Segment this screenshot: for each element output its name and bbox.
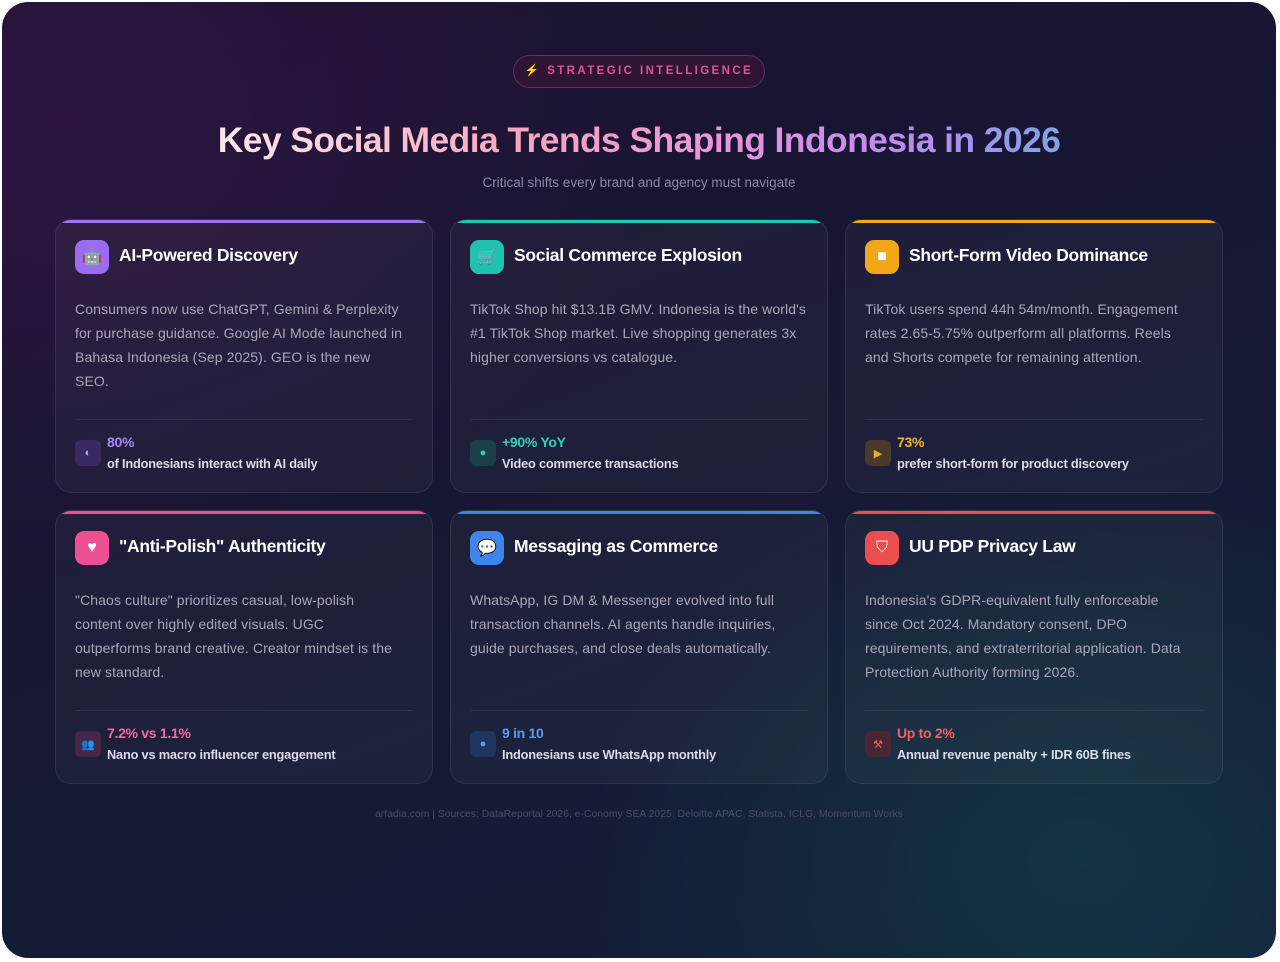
stat icon: ● (480, 447, 486, 459)
icon: cart: 🛒 (477, 249, 497, 266)
icon: shield: ⛉ (876, 539, 888, 556)
heading: AI-Powered Discovery (119, 245, 298, 265)
icon: robot: 🤖 (82, 249, 102, 266)
stat icon (75, 731, 101, 757)
heading: Short-Form Video Dominance (909, 245, 1148, 265)
stat label: Indonesians use WhatsApp monthly (502, 747, 716, 762)
icon: cart (470, 240, 504, 274)
stat label: Annual revenue penalty + IDR 60B fines (897, 747, 1131, 762)
stat value: 80% (107, 434, 134, 450)
stat label: Video commerce transactions (502, 456, 678, 471)
badge (513, 55, 765, 88)
footer: arfadia.com | Sources: DataReportal 2026, e-Conomy SEA 2025, Deloitte APAC, Statista, ICLG, Momentum Works (375, 809, 903, 820)
icon: chat (470, 531, 504, 565)
stat label: prefer short-form for product discovery (897, 456, 1129, 471)
stat icon (865, 731, 891, 757)
stat icon: ▶ (874, 448, 882, 460)
stat value: +90% YoY (502, 434, 566, 450)
stat icon (865, 440, 891, 466)
stat value: 7.2% vs 1.1% (107, 725, 191, 741)
heading: Messaging as Commerce (514, 536, 718, 556)
icon: video: ■ (877, 248, 887, 265)
stat icon (470, 731, 496, 757)
text: TikTok users spend 44h 54m/month. Engagement rates 2.65-5.75% outperform all platforms. Reels and Shorts compete for remaining attention. (865, 301, 1178, 365)
icon: shield (865, 531, 899, 565)
text: WhatsApp, IG DM & Messenger evolved into full transaction channels. AI agents handle inquiries, guide purchases, and close deals automatically. (470, 592, 775, 656)
stat icon: ● (480, 738, 486, 750)
icon: chat: 💬 (477, 540, 497, 557)
stat icon: ◐ (85, 447, 91, 459)
subtitle: Critical shifts every brand and agency must navigate (483, 175, 795, 190)
text: TikTok Shop hit $13.1B GMV. Indonesia is the world's #1 TikTok Shop market. Live shopping generates 3x higher conversions vs catalogue. (470, 301, 806, 365)
text: Indonesia's GDPR-equivalent fully enforceable since Oct 2024. Mandatory consent, DPO requirements, and extraterritorial application. Data Protection Authority forming 2026. (865, 592, 1181, 680)
panel: Messaging as Commerce (450, 510, 828, 784)
stat icon: 👥 (81, 738, 95, 750)
panel: Anti-Polish Authenticity (55, 510, 433, 784)
stat label: of Indonesians interact with AI daily (107, 456, 317, 471)
heading: UU PDP Privacy Law (909, 536, 1075, 556)
stat icon (470, 440, 496, 466)
stat icon (75, 440, 101, 466)
stat label: Nano vs macro influencer engagement (107, 747, 335, 762)
stat value: 9 in 10 (502, 725, 543, 741)
badge: ⚡ STRATEGIC INTELLIGENCE (525, 65, 753, 77)
title: Key Social Media Trends Shaping Indonesia in 2026 (218, 120, 1060, 160)
panel: Social Commerce Explosion (450, 219, 828, 493)
panel: AI-Powered Discovery (55, 219, 433, 493)
stat icon: ⚒ (873, 738, 883, 750)
heading: "Anti-Polish" Authenticity (119, 536, 325, 556)
icon: video (865, 240, 899, 274)
text: "Chaos culture" prioritizes casual, low-polish content over highly edited visuals. UGC outperforms brand creative. Creator mindset is the new standard. (75, 592, 392, 680)
heading: Social Commerce Explosion (514, 245, 742, 265)
stat value: 73% (897, 434, 924, 450)
panel: Short-Form Video Dominance (845, 219, 1223, 493)
text: Consumers now use ChatGPT, Gemini & Perplexity for purchase guidance. Google AI Mode launched in Bahasa Indonesia (Sep 2025). GEO is the new SEO. (75, 301, 402, 389)
panel: UU PDP Privacy Law (845, 510, 1223, 784)
icon: robot (75, 240, 109, 274)
stat value: Up to 2% (897, 725, 954, 741)
icon: heart: ♥ (87, 539, 97, 556)
icon: heart (75, 531, 109, 565)
